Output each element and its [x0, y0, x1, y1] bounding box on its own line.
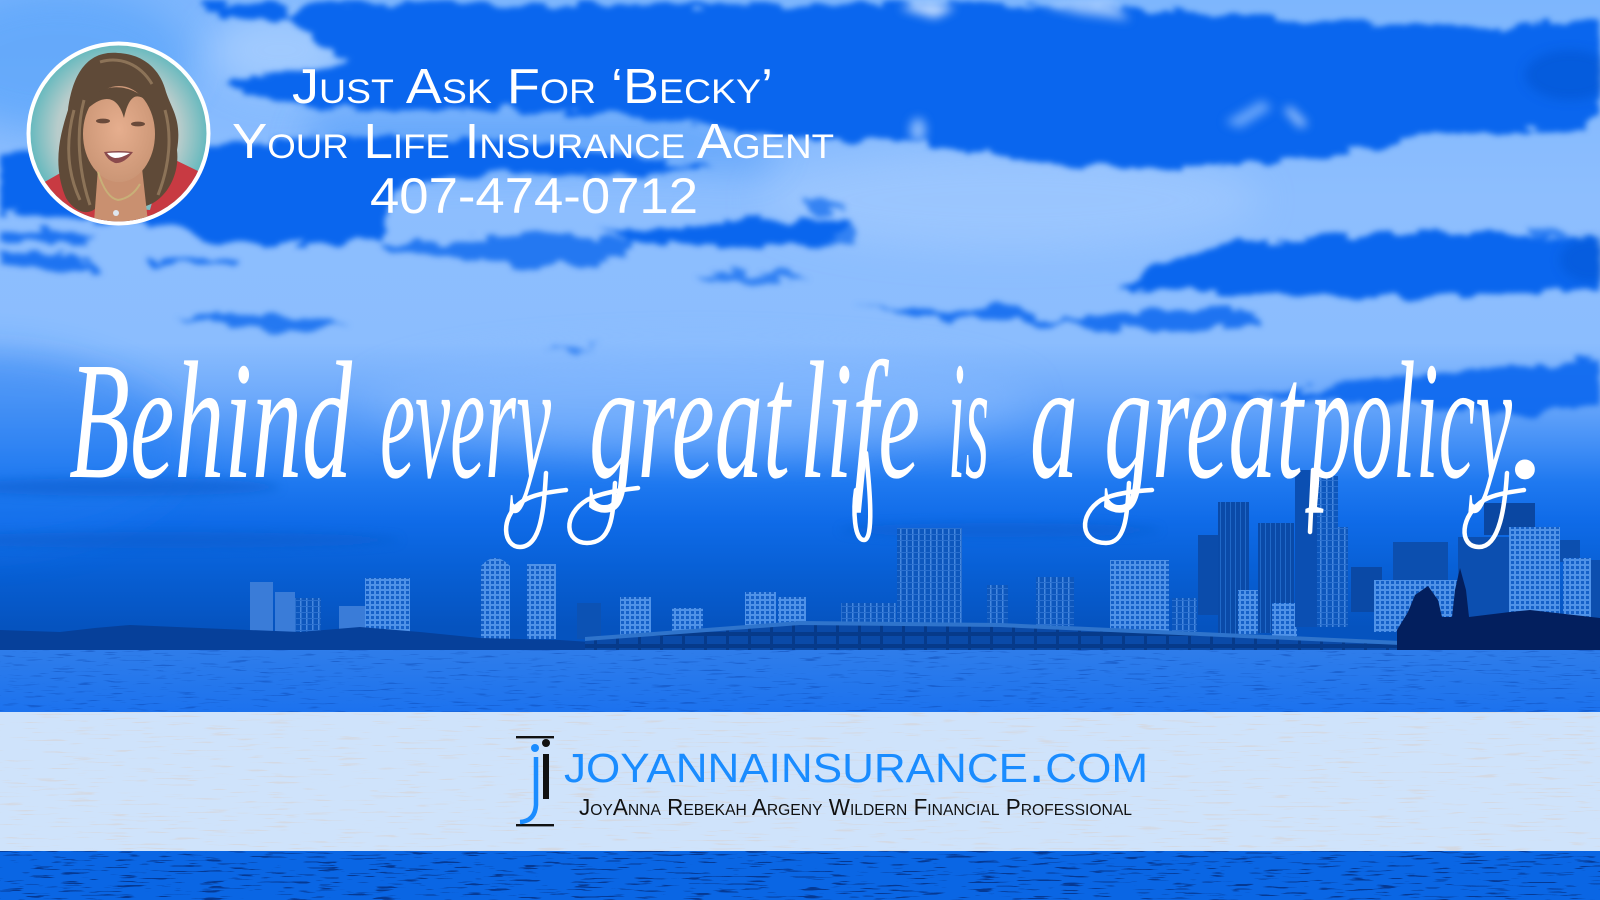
- jacket: [45, 161, 198, 222]
- hair strands: [69, 60, 169, 205]
- hair over forehead: [89, 87, 143, 118]
- icon: ji logo: [516, 736, 554, 826]
- bridge: [585, 621, 1400, 652]
- water lower: [0, 851, 1600, 900]
- cloud: mid left bank: [0, 136, 714, 245]
- water upper: [0, 650, 1600, 712]
- slogan: .: [1508, 328, 1550, 514]
- face: [83, 86, 155, 182]
- slogan: Behind: [69, 328, 353, 514]
- neck and chest: [94, 168, 148, 222]
- slogan decorative swashes: [506, 453, 1524, 547]
- slogan: every: [380, 328, 551, 514]
- skyline buildings: [250, 470, 1600, 640]
- eyes: [96, 119, 110, 123]
- white translucent band: [0, 712, 1600, 851]
- cloud: right bank: [1121, 233, 1600, 297]
- horizon haze bands: [0, 478, 1160, 548]
- heading: agent contact: [232, 60, 834, 224]
- slogan: a: [1030, 328, 1078, 514]
- hair: [58, 53, 178, 212]
- cloud: lower strip: [850, 303, 1262, 332]
- background: sky: [0, 0, 1600, 660]
- phone number: 407-474-0712: [370, 168, 698, 224]
- mottled mid-tone behind the heading: [300, 112, 780, 170]
- trees right shore: [1397, 568, 1600, 658]
- agent name line: JoyAnna Rebekah Argeny Wildern Financial Professional: [579, 794, 1132, 820]
- slogan: [69, 328, 1550, 514]
- cloud: main top bank: [200, 0, 1600, 172]
- cloud: far-left streaks: [0, 228, 240, 272]
- heading line 2: Your Life Insurance Agent: [232, 115, 834, 169]
- heading line 1: Just Ask For ‘Becky’: [292, 60, 773, 114]
- slogan: great: [1104, 328, 1305, 514]
- website url: joyannainsurance.com: [564, 730, 1148, 795]
- cloud: strip under phone: [383, 232, 640, 268]
- clouds: [0, 0, 1600, 415]
- darker cores and highlights in clouds: [900, 0, 1600, 282]
- portrait photo: [26, 40, 211, 226]
- slogan: great: [589, 328, 792, 514]
- cloud: lower right: [1183, 360, 1600, 415]
- slogan: is: [948, 328, 989, 514]
- slogan: life: [800, 328, 920, 514]
- cloud: low small puffs: [540, 200, 855, 350]
- treeline left shore: [0, 625, 590, 652]
- necklace: [98, 172, 140, 200]
- smile: [104, 151, 133, 163]
- cloud: small low-left streak: [180, 313, 350, 330]
